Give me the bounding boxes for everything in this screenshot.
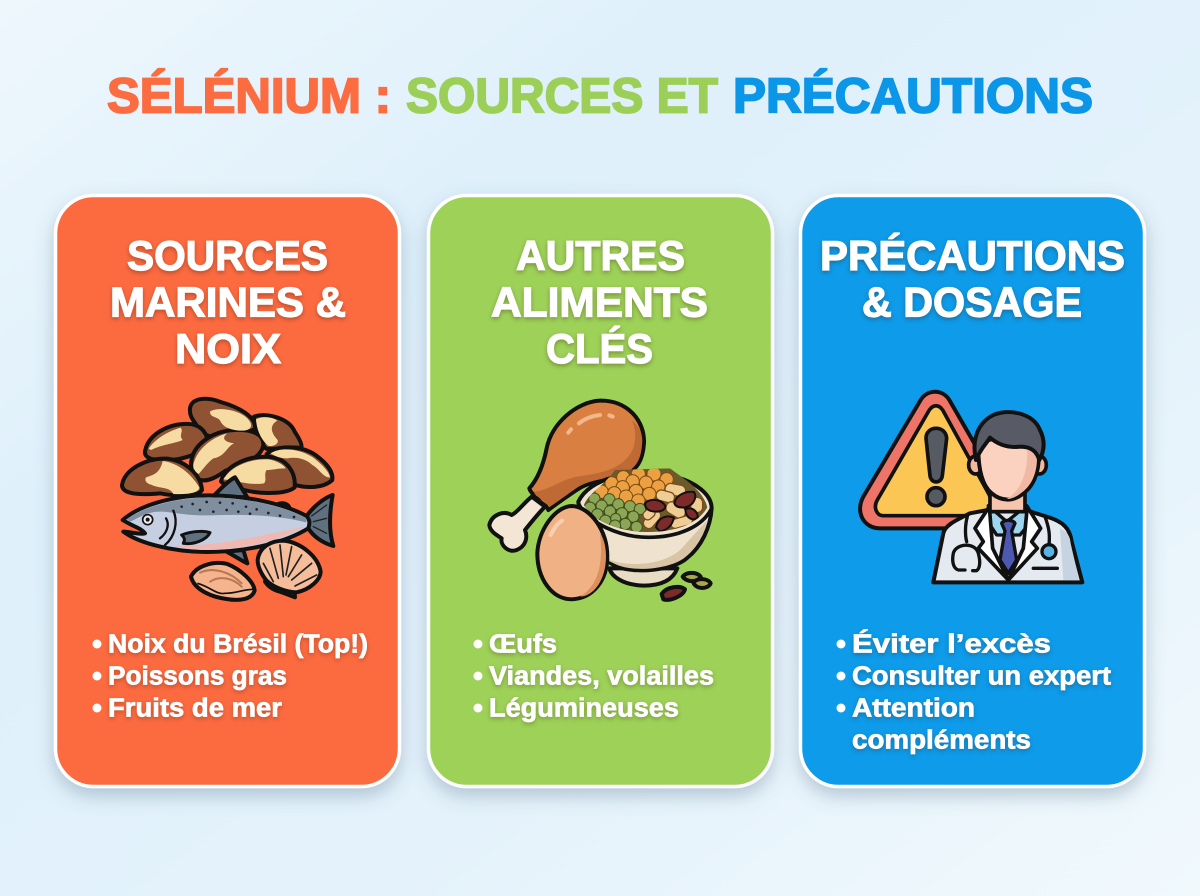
heading: autres aliments cles: ALIMENTS bbox=[491, 278, 708, 326]
bullet list: autres aliments bbox=[474, 630, 714, 722]
panel: precautions et dosage bbox=[800, 196, 1144, 786]
heading: sources marines et noix: MARINES & bbox=[110, 278, 346, 326]
title: SOURCES ET bbox=[406, 70, 718, 124]
icon: brazil nuts, fish and shells bbox=[122, 399, 333, 600]
card background: orange bbox=[56, 196, 400, 786]
card background: green bbox=[428, 196, 772, 786]
bullet list: sources: Fruits de mer bbox=[108, 694, 282, 722]
bullet list: sources: Noix du Brésil (Top!) bbox=[108, 630, 368, 658]
heading: sources marines et noix: NOIX bbox=[175, 325, 281, 372]
bullet list: precautions: Éviter l’excès bbox=[852, 630, 1051, 658]
bullet list: sources bbox=[92, 630, 368, 722]
title bbox=[107, 70, 1093, 124]
heading: precautions et dosage: & DOSAGE bbox=[862, 278, 1082, 326]
heading: autres aliments cles bbox=[491, 232, 708, 372]
icon: warning triangle and doctor bbox=[860, 392, 1082, 582]
heading: sources marines et noix bbox=[110, 232, 346, 372]
heading: precautions et dosage bbox=[820, 232, 1125, 326]
bullet list: precautions: Attention bbox=[852, 694, 975, 722]
title: PRÉCAUTIONS bbox=[733, 70, 1093, 124]
heading: autres aliments cles: AUTRES bbox=[516, 232, 685, 279]
panel: autres aliments cles bbox=[428, 196, 772, 786]
bowl contents bbox=[584, 468, 708, 532]
title: SÉLÉNIUM : bbox=[107, 70, 391, 124]
icon: drumstick, egg and bowl of legumes bbox=[489, 401, 713, 600]
bullet list: autres aliments: Viandes, volailles bbox=[489, 662, 714, 690]
bullet list: precautions: Consulter un expert bbox=[852, 662, 1112, 690]
panel: sources marines et noix bbox=[56, 196, 400, 786]
bullet list: autres aliments: Œufs bbox=[489, 630, 557, 658]
bullet list: autres aliments: Légumineuses bbox=[489, 694, 679, 722]
bullet list: precautions: compléments bbox=[852, 726, 1031, 754]
bullet list: precautions bbox=[836, 630, 1112, 754]
card background: blue bbox=[800, 196, 1144, 786]
heading: sources marines et noix: SOURCES bbox=[127, 232, 328, 279]
heading: precautions et dosage: PRÉCAUTIONS bbox=[820, 232, 1125, 279]
bullet list: sources: Poissons gras bbox=[108, 662, 287, 690]
heading: autres aliments cles: CLÉS bbox=[546, 325, 653, 372]
